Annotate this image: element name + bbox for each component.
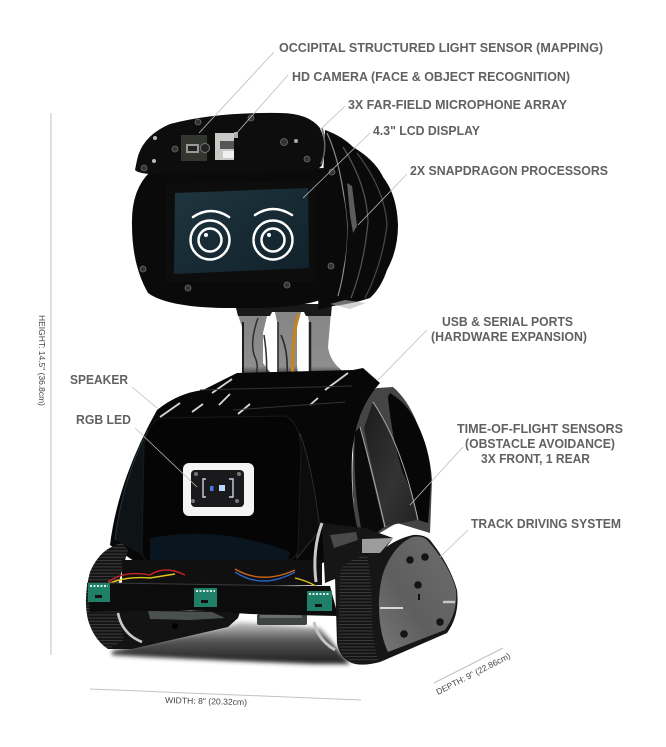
width dimension xyxy=(90,689,361,707)
label: microphone array: 3X FAR-FIELD MICROPHONE ARRAY xyxy=(348,98,568,112)
chassis upper xyxy=(122,560,322,585)
wires xyxy=(108,569,325,592)
RGB LED module xyxy=(183,463,254,516)
label: time-of-flight sensors: (OBSTACLE AVOIDANCE) xyxy=(465,437,615,451)
left eye xyxy=(190,211,230,260)
sensor right xyxy=(307,591,332,611)
robot xyxy=(86,113,458,665)
HD camera xyxy=(215,132,238,160)
leader lines xyxy=(132,52,468,557)
width dimension: WIDTH: 8" (20.32cm) xyxy=(165,695,247,707)
label: USB and serial ports xyxy=(431,315,587,344)
label: track driving system: TRACK DRIVING SYSTEM xyxy=(471,517,621,531)
sensor left xyxy=(88,583,110,602)
body shell xyxy=(110,368,380,565)
head top sensor plate xyxy=(135,113,325,174)
centre motor xyxy=(257,614,307,625)
label: HD camera: HD CAMERA (FACE & OBJECT RECOGNITION) xyxy=(292,70,570,84)
body right fin xyxy=(352,387,432,547)
right chrome hub xyxy=(314,523,393,650)
label: LCD display: 4.3" LCD DISPLAY xyxy=(373,124,481,138)
label: occipital sensor: OCCIPITAL STRUCTURED LIGHT SENSOR (MAPPING) xyxy=(279,41,603,55)
right eye xyxy=(254,209,292,260)
label: USB and serial ports: USB & SERIAL PORTS xyxy=(442,315,573,329)
label: time-of-flight sensors: TIME-OF-FLIGHT SENSORS xyxy=(457,422,623,436)
depth dimension: DEPTH: 9" (22.86cm) xyxy=(434,651,512,697)
sensor centre xyxy=(194,588,217,607)
structured light sensor xyxy=(181,135,210,161)
body front panel xyxy=(142,416,301,562)
right track and side plate xyxy=(335,535,458,665)
height dimension: HEIGHT: 14.5" (36.8cm) xyxy=(37,315,47,406)
floor shadow xyxy=(112,622,350,664)
neck xyxy=(235,304,344,392)
label: RGB LED: RGB LED xyxy=(76,413,131,427)
front sensor bar xyxy=(87,583,338,616)
label: processors: 2X SNAPDRAGON PROCESSORS xyxy=(410,164,608,178)
face screws xyxy=(140,169,335,291)
left track xyxy=(86,543,240,649)
head rear fins xyxy=(318,130,398,310)
label: time-of-flight sensors: 3X FRONT, 1 REAR xyxy=(481,452,590,466)
label: USB and serial ports: (HARDWARE EXPANSION) xyxy=(431,330,587,344)
label: speaker: SPEAKER xyxy=(70,373,128,387)
LCD screen xyxy=(174,188,309,274)
label: time-of-flight sensors xyxy=(457,422,623,466)
head face plate xyxy=(132,168,347,308)
